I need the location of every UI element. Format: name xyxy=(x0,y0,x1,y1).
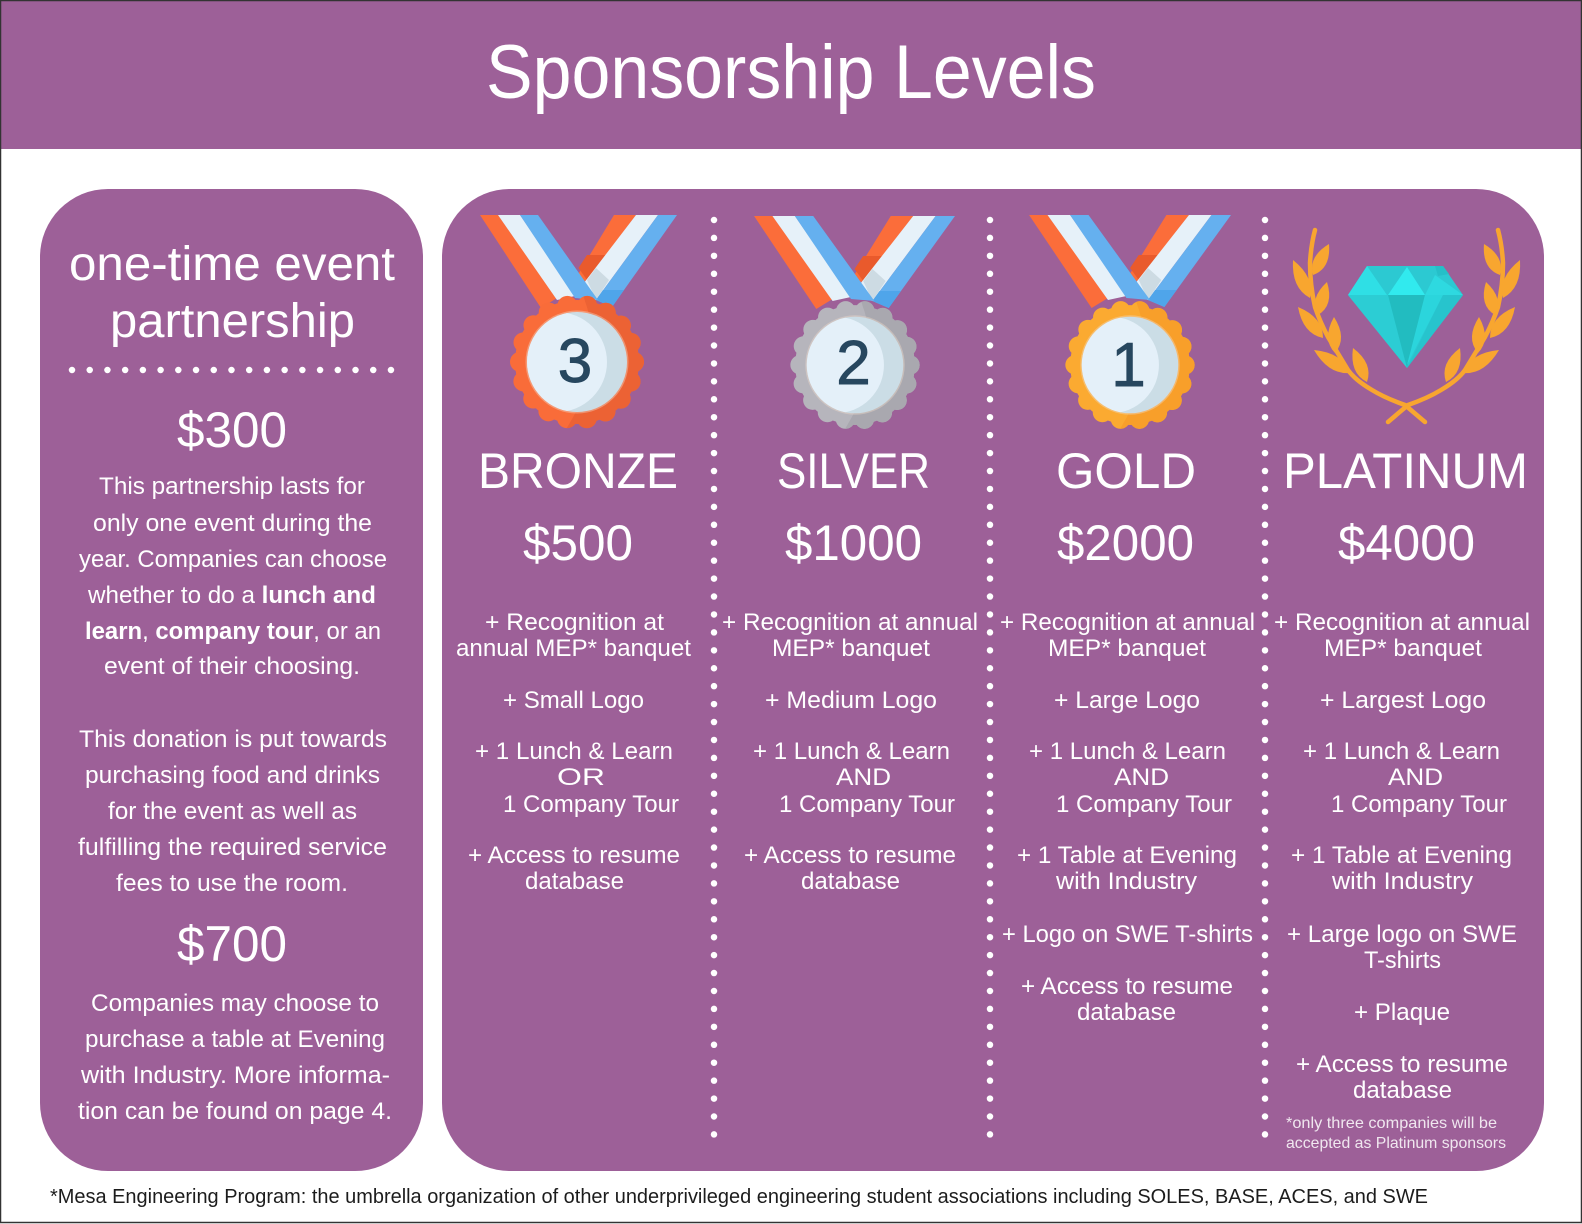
footnote: platinum limit xyxy=(1286,1115,1506,1152)
benefits: platinum: + 1 Lunch & Learn xyxy=(1303,738,1500,765)
column: gold xyxy=(1000,215,1255,1026)
column: bronze xyxy=(456,215,691,895)
text block: partnership description: learn, company tour, or an xyxy=(85,618,381,645)
benefits: gold: database xyxy=(1077,999,1176,1026)
text block: partnership description: only one event during the xyxy=(93,510,372,537)
price: $4000: $4000 xyxy=(1338,515,1475,571)
header band xyxy=(0,0,1582,149)
panel: sponsorship tiers xyxy=(442,189,1544,1171)
benefits: platinum: + Large logo on SWE xyxy=(1287,921,1517,948)
price: $2000: $2000 xyxy=(1057,515,1194,571)
benefits: platinum: + 1 Table at Evening xyxy=(1291,842,1512,869)
column: silver xyxy=(722,216,978,895)
benefits: platinum: + Plaque xyxy=(1354,999,1450,1026)
price: $300: $300 xyxy=(177,402,287,458)
benefits: silver: MEP* banquet xyxy=(772,635,930,662)
benefits: bronze: annual MEP* banquet xyxy=(456,635,691,662)
icon: diamond with laurel xyxy=(1293,230,1520,422)
text block: partnership description: fulfilling the required service xyxy=(78,834,387,861)
text block: partnership description: fees to use the room. xyxy=(116,870,348,897)
footer note: *Mesa Engineering Program: the umbrella organization of other underprivileged engineering student associations including SOLES, BASE, ACES, and SWE xyxy=(50,1186,1428,1208)
benefits: platinum: + Recognition at annual xyxy=(1274,609,1530,636)
benefits: gold: MEP* banquet xyxy=(1048,635,1206,662)
benefits: platinum: AND xyxy=(1388,764,1443,791)
price: $1000: $1000 xyxy=(785,515,922,571)
benefits: platinum: T-shirts xyxy=(1364,947,1441,974)
text block: partnership description: event of their choosing. xyxy=(104,653,360,680)
benefits: platinum: + Largest Logo xyxy=(1320,687,1486,714)
benefits: bronze: 1 Company Tour xyxy=(503,791,679,818)
text block: partnership description: for the event as well as xyxy=(108,798,357,825)
benefits: silver: AND xyxy=(836,764,891,791)
title: Sponsorship Levels xyxy=(486,30,1096,115)
benefits: gold xyxy=(1000,609,1255,1026)
benefits: gold: 1 Company Tour xyxy=(1056,791,1232,818)
heading: gold: GOLD xyxy=(1056,443,1196,499)
benefits: platinum xyxy=(1274,609,1530,1104)
icon: gold medal xyxy=(1029,215,1231,425)
icon: bronze medal: 3 xyxy=(558,327,592,396)
icon: bronze medal xyxy=(480,215,677,424)
text block: partnership description xyxy=(78,473,387,897)
benefits: bronze xyxy=(456,609,691,895)
panel heading: one-time event xyxy=(69,238,395,291)
benefits: silver: + Recognition at annual xyxy=(722,609,978,636)
benefits: gold: + 1 Lunch & Learn xyxy=(1029,738,1226,765)
icon: gold medal: 1 xyxy=(1111,331,1146,400)
benefits: silver xyxy=(722,609,978,895)
benefits: gold: with Industry xyxy=(1055,868,1197,895)
benefits: silver: + Access to resume xyxy=(744,842,956,869)
text block: table description: purchase a table at Evening xyxy=(85,1026,385,1053)
panel: one-time event partnership xyxy=(40,189,423,1171)
icon: silver medal xyxy=(754,216,955,425)
heading: bronze: BRONZE xyxy=(478,443,678,499)
text block: table description: Companies may choose to xyxy=(91,990,379,1017)
text block: table description: with Industry. More informa- xyxy=(80,1062,390,1089)
text block: partnership description: whether to do a lunch and xyxy=(87,582,376,609)
text block: table description: tion can be found on page 4. xyxy=(78,1098,392,1125)
benefits: bronze: OR xyxy=(557,764,605,791)
benefits: gold: + 1 Table at Evening xyxy=(1017,842,1237,869)
heading: platinum: PLATINUM xyxy=(1283,443,1528,499)
panel heading xyxy=(69,238,395,348)
text block: partnership description: This donation is put towards xyxy=(79,726,387,753)
benefits: bronze: + Access to resume xyxy=(468,842,680,869)
benefits: silver: + Medium Logo xyxy=(765,687,937,714)
benefits: bronze: + Small Logo xyxy=(503,687,644,714)
column: platinum xyxy=(1274,230,1530,1152)
benefits: silver: database xyxy=(801,868,900,895)
heading: silver: SILVER xyxy=(777,443,930,499)
footnote: platinum limit: *only three companies will be xyxy=(1286,1115,1497,1132)
icon: silver medal: 2 xyxy=(836,329,871,398)
price: $500: $500 xyxy=(523,515,633,571)
benefits: silver: 1 Company Tour xyxy=(779,791,955,818)
benefits: platinum: with Industry xyxy=(1331,868,1473,895)
text block: table description xyxy=(78,990,392,1125)
text block: partnership description: This partnership lasts for xyxy=(99,473,365,500)
benefits: bronze: + 1 Lunch & Learn xyxy=(475,738,673,765)
benefits: platinum: 1 Company Tour xyxy=(1331,791,1507,818)
benefits: bronze: + Recognition at xyxy=(485,609,664,636)
footnote: platinum limit: accepted as Platinum sponsors xyxy=(1286,1135,1506,1152)
benefits: gold: + Large Logo xyxy=(1054,687,1200,714)
benefits: platinum: + Access to resume xyxy=(1296,1051,1508,1078)
text block: partnership description: purchasing food and drinks xyxy=(85,762,380,789)
text block: partnership description: year. Companies can choose xyxy=(79,546,387,573)
benefits: platinum: MEP* banquet xyxy=(1324,635,1482,662)
panel heading: partnership xyxy=(110,295,355,348)
benefits: gold: AND xyxy=(1114,764,1169,791)
benefits: silver: + 1 Lunch & Learn xyxy=(753,738,950,765)
benefits: gold: + Access to resume xyxy=(1021,973,1233,1000)
benefits: platinum: database xyxy=(1353,1077,1452,1104)
benefits: gold: + Recognition at annual xyxy=(1000,609,1255,636)
benefits: bronze: database xyxy=(525,868,624,895)
price: $700: $700 xyxy=(177,916,287,972)
benefits: gold: + Logo on SWE T-shirts xyxy=(1002,921,1253,948)
